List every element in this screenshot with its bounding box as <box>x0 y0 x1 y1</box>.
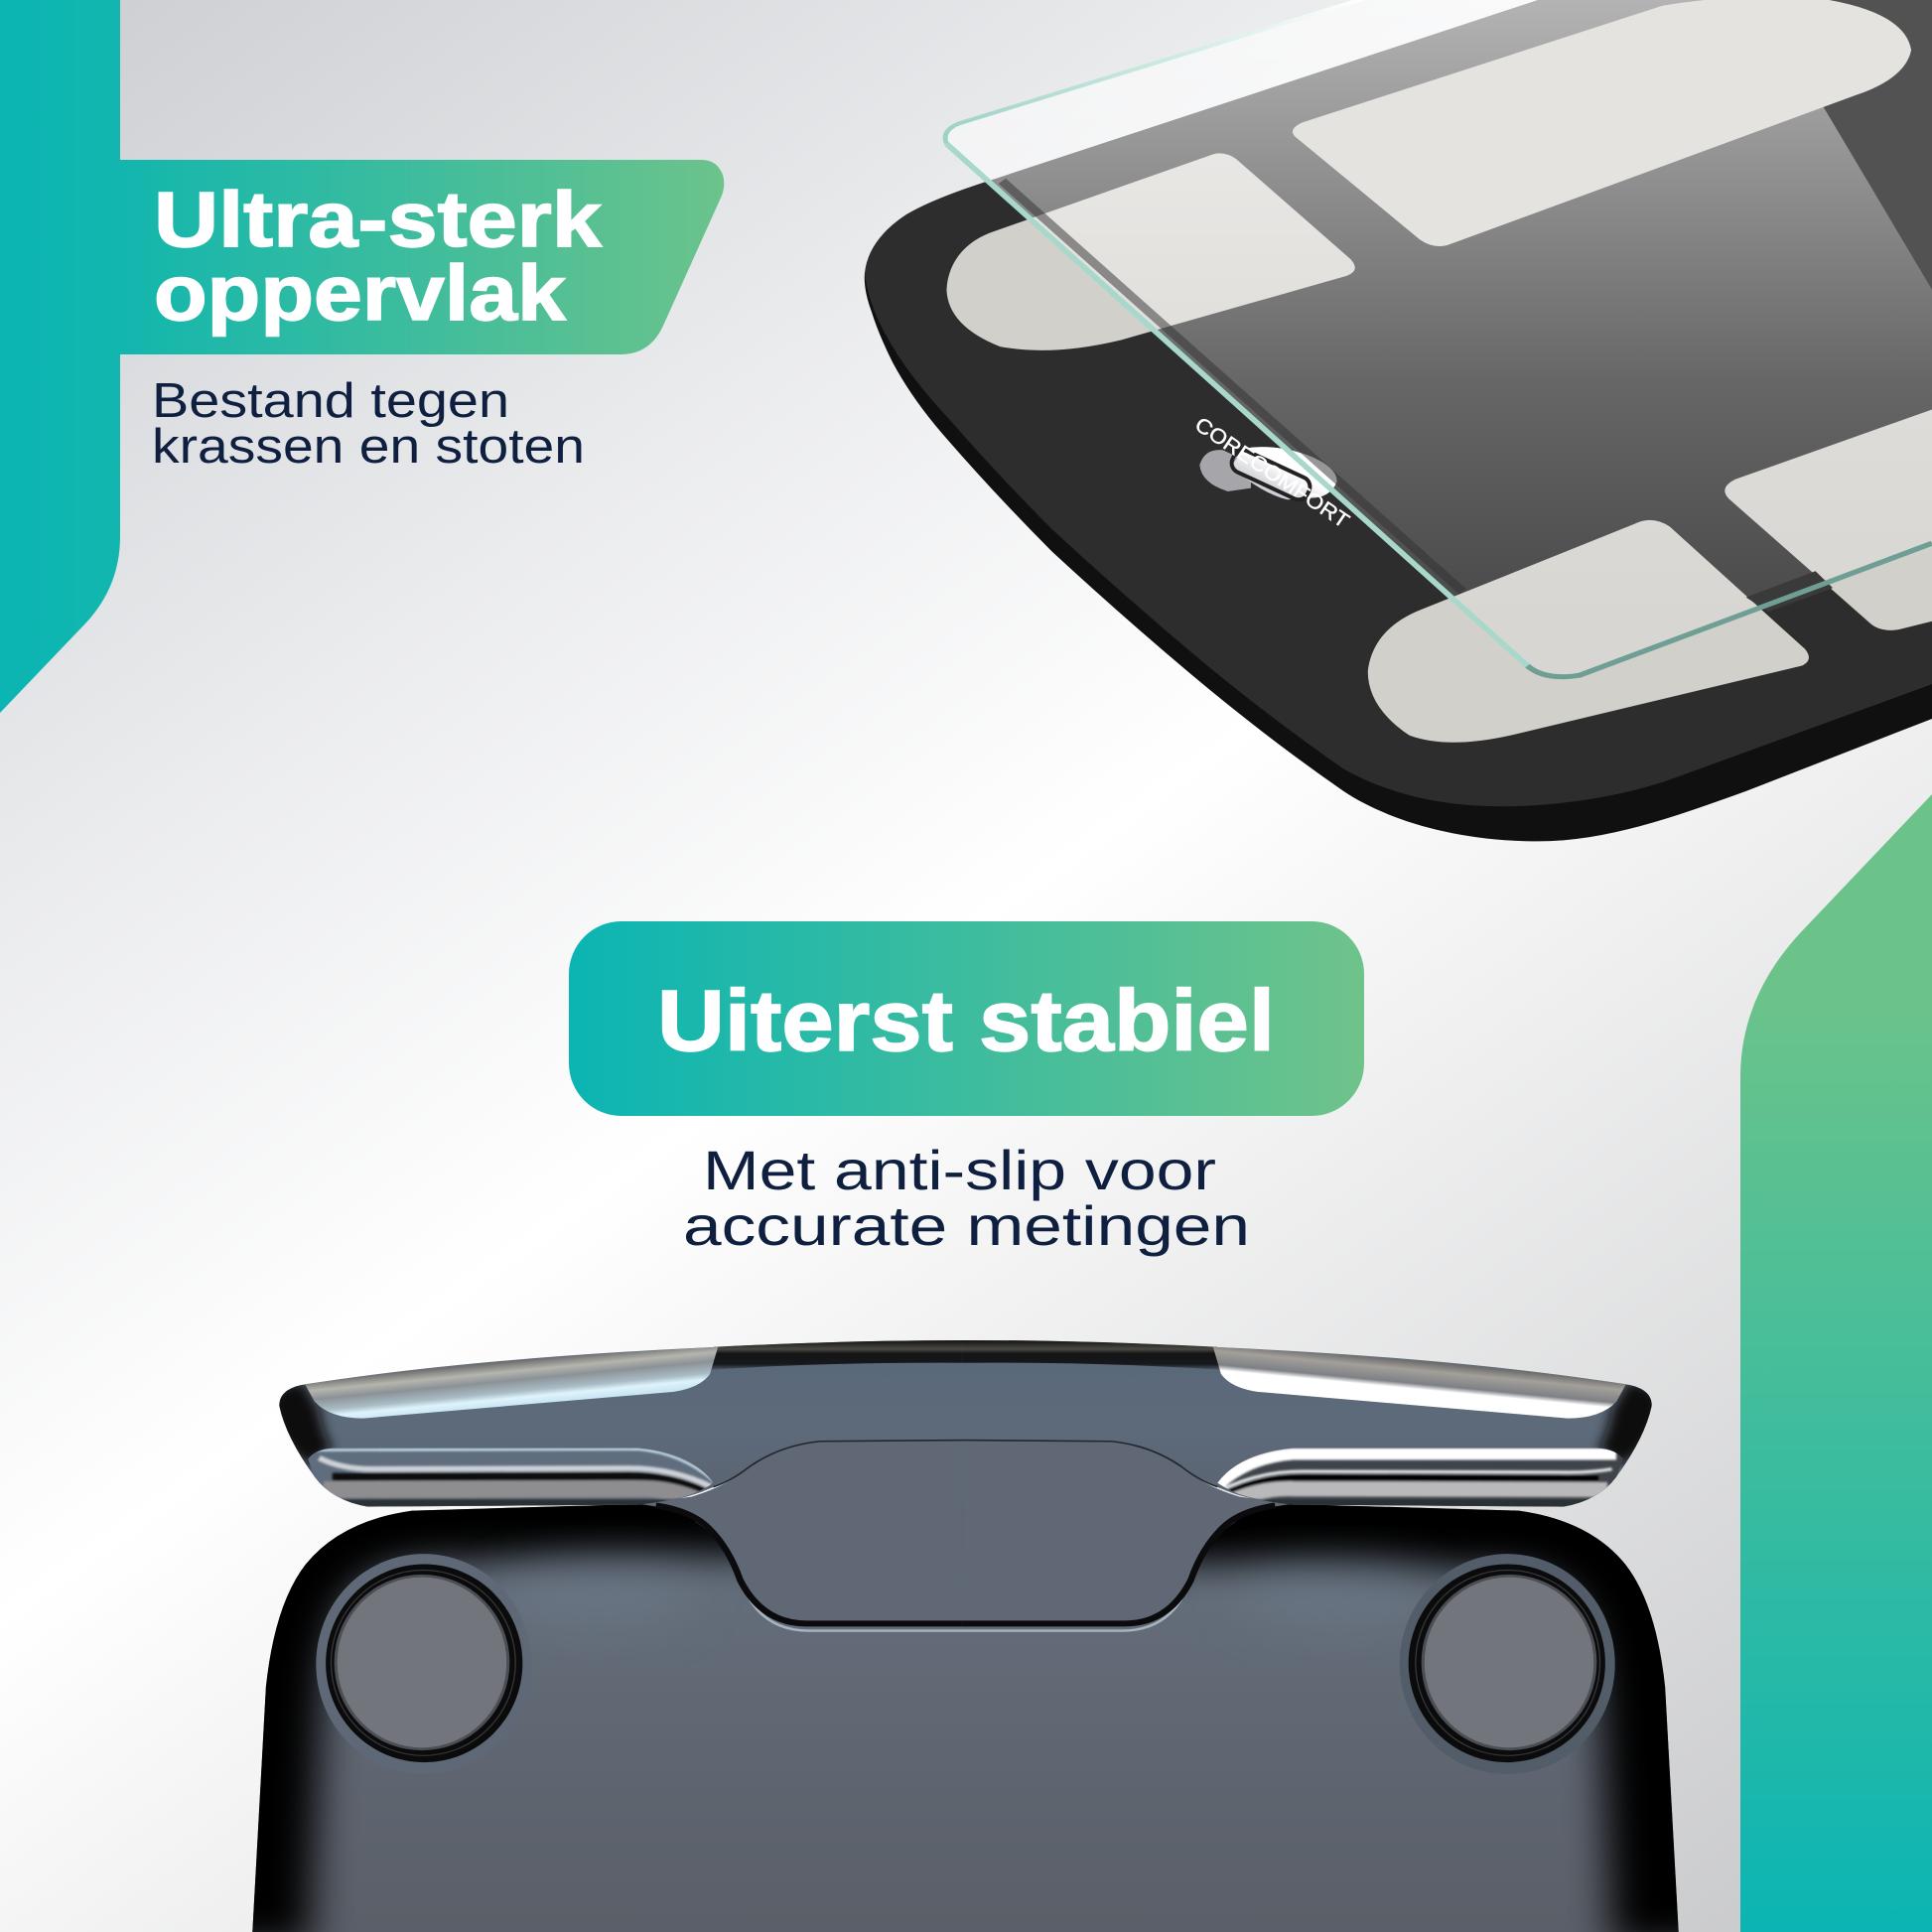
glass highlight <box>305 1347 718 1419</box>
banner: Ultra-sterk oppervlak <box>120 160 724 354</box>
text block: stability description <box>683 1139 1250 1257</box>
plate end cap <box>270 1382 333 1465</box>
recess edge highlight <box>963 1521 1235 1631</box>
foot <box>1400 1554 1615 1774</box>
sensor pad: top long <box>1293 0 1911 246</box>
text block: surface description: Bestand tegen <box>152 374 509 428</box>
body <box>252 1504 968 1932</box>
sensor pad: bottom <box>1368 520 1809 743</box>
top plate <box>279 1340 968 1507</box>
plate end cap <box>1598 1382 1661 1465</box>
text block: stability description: Met anti-slip voor <box>703 1139 1216 1201</box>
logo: CoreComfort <box>1199 447 1337 502</box>
panel: right green band <box>1740 794 1932 1932</box>
dark diagonal band under glass <box>1760 0 1932 290</box>
body <box>963 1504 1679 1932</box>
banner: Uiterst stabiel <box>569 921 1364 1116</box>
centre recess <box>963 1438 1293 1625</box>
plate top dark band <box>709 1340 968 1370</box>
illustration: bottom scale, right half <box>963 1340 1679 1932</box>
chrome rim <box>308 1448 713 1507</box>
top plate <box>963 1340 1652 1507</box>
heading line 1: Ultra-sterk <box>154 175 603 263</box>
glass bottom edge <box>1528 543 1932 677</box>
sensor pad: left top <box>946 153 1355 350</box>
glass left edge <box>946 144 1528 666</box>
illustration: top scale with glass plate <box>865 0 1932 841</box>
heading line 2: oppervlak <box>154 248 567 337</box>
recess top line <box>714 1441 968 1487</box>
scale top surface <box>865 0 1932 806</box>
recess edge highlight <box>696 1521 968 1631</box>
centre recess <box>638 1438 968 1625</box>
dark strip under glass <box>1746 571 1833 612</box>
heading: Uiterst stabiel <box>657 973 1275 1069</box>
glass highlight <box>1213 1347 1626 1419</box>
logo wordmark: CORECOMFORT <box>1190 413 1353 533</box>
text block: stability description: accurate metingen <box>683 1194 1250 1257</box>
chrome rim <box>1217 1448 1622 1507</box>
panel: left teal band <box>0 0 120 713</box>
recess edge <box>656 1505 968 1623</box>
recess edge <box>963 1505 1275 1623</box>
glass plate overlay <box>945 0 1932 677</box>
illustration: bottom scale, left half <box>252 1340 968 1932</box>
glass inner shadow <box>1002 181 1463 592</box>
sensor pad: right <box>1725 409 1932 630</box>
text block: surface description: krassen en stoten <box>152 420 585 474</box>
body rim shadow <box>252 1504 737 1932</box>
plate top dark band <box>963 1340 1222 1370</box>
text block: surface description <box>152 374 585 474</box>
body rim shadow <box>1189 1504 1679 1932</box>
glass top edge <box>945 0 1364 144</box>
recess top line <box>963 1441 1217 1487</box>
foot <box>316 1554 531 1774</box>
scale base shadow edge <box>865 0 1932 841</box>
